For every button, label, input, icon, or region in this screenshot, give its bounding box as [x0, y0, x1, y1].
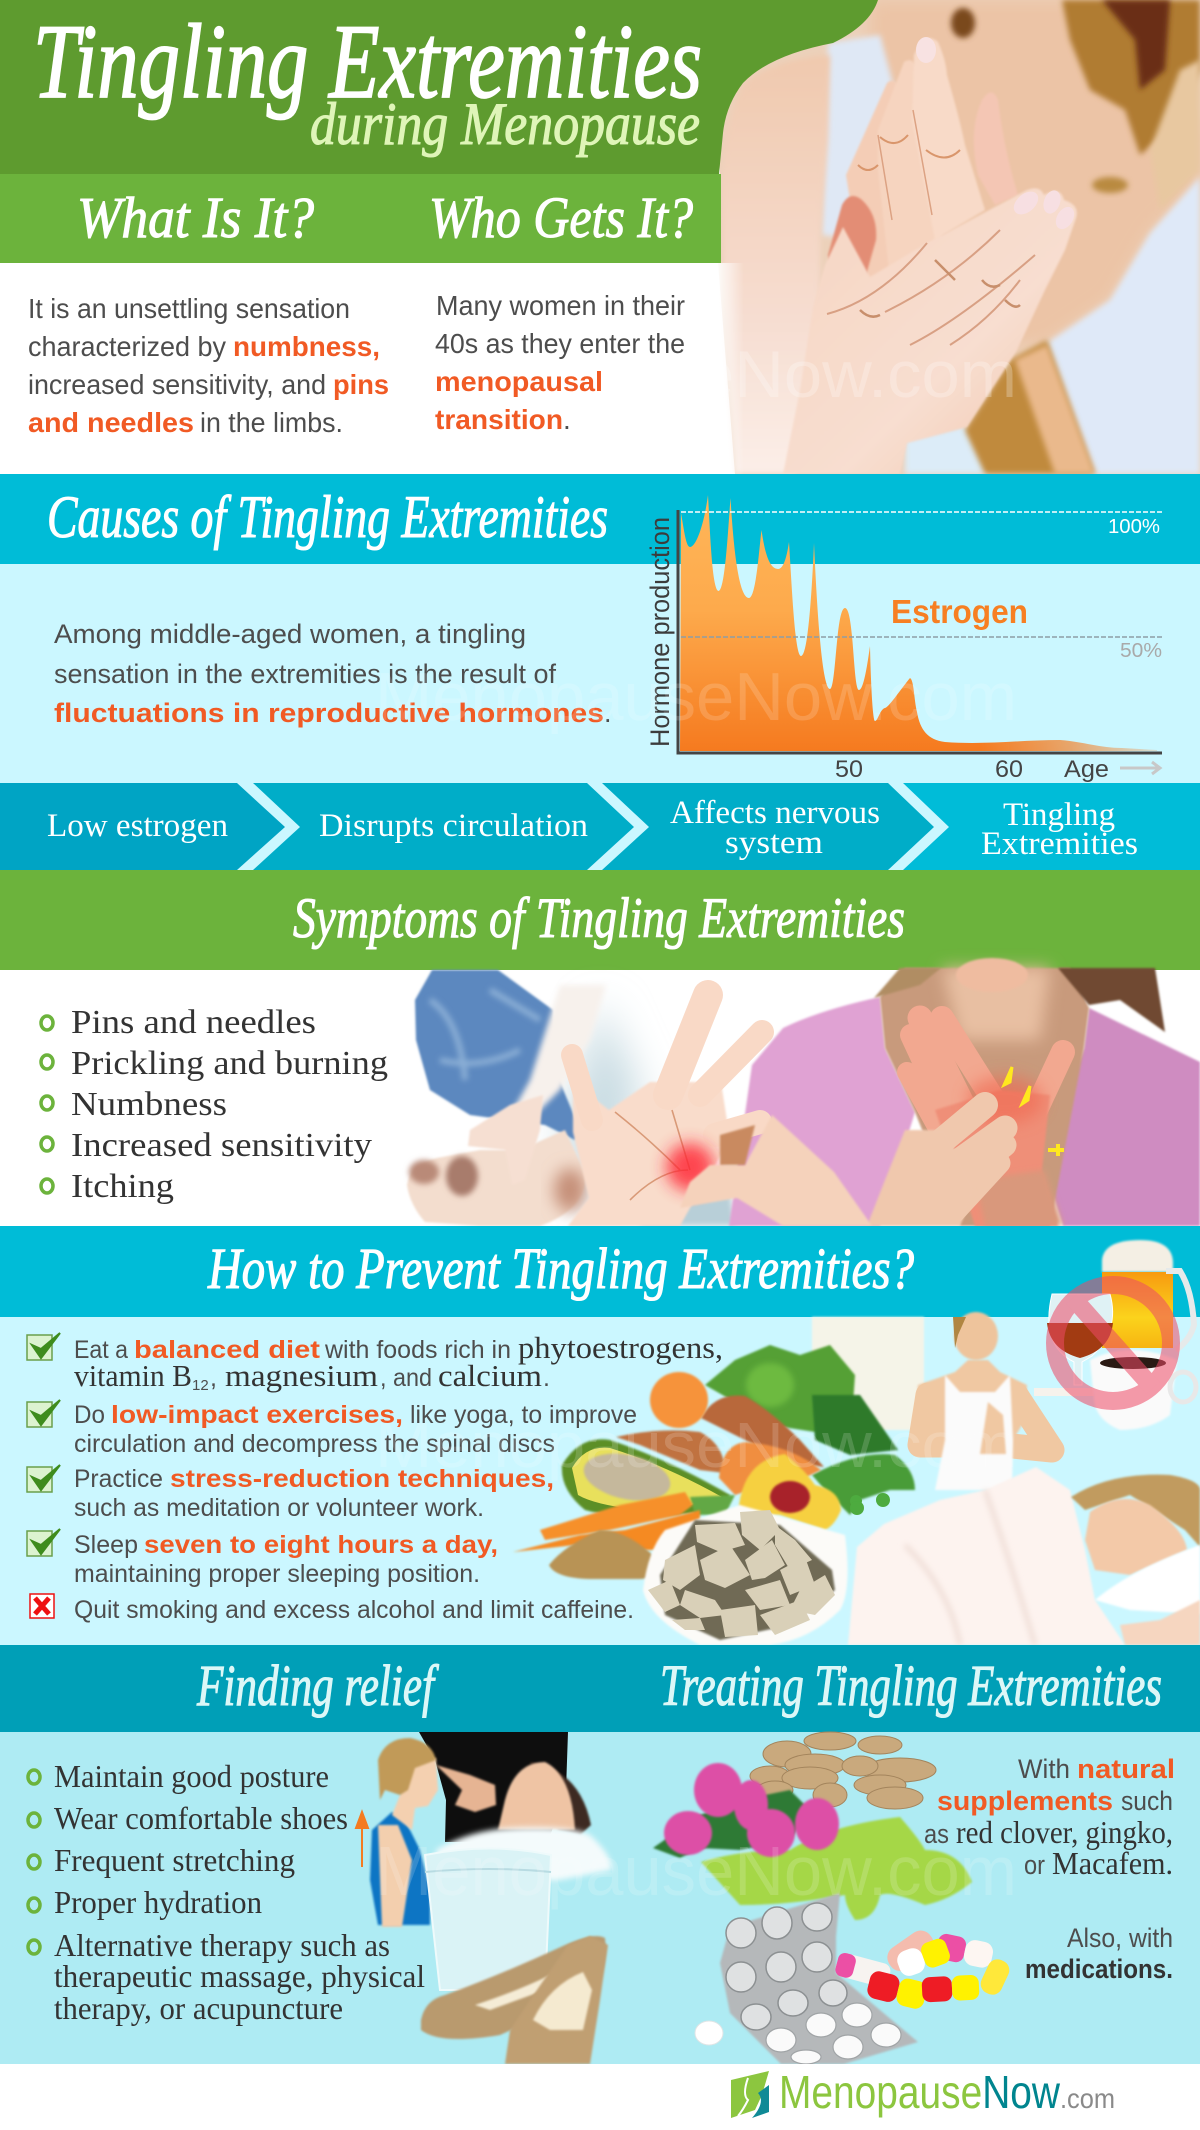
text block: who gets it: Many women in their [436, 290, 685, 321]
logo domain: .com [1060, 2083, 1115, 2114]
text block: natural supplements: natural [1077, 1754, 1175, 1784]
photo: jeans highlights [430, 990, 540, 1080]
photo: rear thumb [974, 92, 1018, 205]
photo: palm lines [615, 1110, 690, 1200]
photo: peach [739, 1454, 841, 1530]
photo: sweet potato big [701, 1395, 824, 1467]
list item: balanced diet: Eat a [74, 1336, 128, 1364]
photo: lower hand back [867, 1130, 975, 1226]
title [33, 3, 702, 157]
step label: tingling extremities [981, 797, 1138, 862]
photo: clover leaves [653, 1790, 810, 1858]
text block: natural supplements: or [1024, 1850, 1045, 1880]
text block: who gets it [435, 290, 685, 435]
photo: third finger [846, 81, 925, 290]
list item: balanced diet: balanced diet [134, 1336, 321, 1364]
chart tick: 60: 60 [995, 756, 1023, 783]
photo: whisky glass [1049, 1294, 1113, 1385]
photo: capsule red and yellow two [921, 1975, 980, 2002]
photo: towel [436, 1827, 612, 1880]
panel: prevention body [0, 1317, 1200, 1645]
photo: bluish shadow under pinch [640, 1190, 735, 1226]
photo: pink top right [1043, 1008, 1200, 1226]
text block: natural supplements: such [1121, 1786, 1173, 1816]
photo: beer foam [1102, 1240, 1173, 1272]
photo: chest and neck skin [870, 0, 1200, 350]
heading: what is it: What Is It? [77, 185, 314, 250]
photo: carrot one [540, 1492, 693, 1540]
logo: MenopauseNow [731, 2066, 1115, 2118]
photo: relief collage [356, 1732, 612, 2064]
photo: nail long finger [916, 37, 936, 63]
list item: balanced diet: . [543, 1364, 550, 1392]
list item: sleep: seven to eight hours a day, [144, 1531, 498, 1559]
photo: patient hair [530, 1762, 591, 1835]
arrow segment: disrupts circulation [253, 783, 642, 870]
photo: dark spinach [812, 1395, 898, 1455]
photo: pinching hand [680, 1115, 872, 1226]
photo: pale shadow beside sleeve [560, 1000, 640, 1226]
photo: white fade on the left [716, 263, 744, 474]
photo: white sleeve [505, 985, 606, 1130]
heading: finding relief: Finding relief [196, 1653, 439, 1718]
text block: what is it: characterized by [28, 331, 226, 362]
text block: causes [54, 619, 612, 728]
arrow segment: low estrogen [0, 783, 292, 870]
photo: long finger [912, 38, 985, 240]
text block: causes: Among middle-aged women, a tingling [54, 619, 526, 649]
photo: hair right [1058, 968, 1165, 1032]
panel: symptoms body [0, 970, 1200, 1226]
list item: balanced diet: , [210, 1364, 217, 1392]
photo: finger creases [858, 135, 960, 170]
text block: medications [1025, 1923, 1173, 1984]
photo: foot sole [407, 1130, 586, 1226]
arrow: orange upward arrow [356, 1812, 368, 1867]
photo: front hand and wrist [783, 188, 1077, 474]
panel: causes heading band [0, 474, 1200, 564]
symptom list: Itching [71, 1168, 174, 1205]
photo: palm on chest [935, 1090, 1058, 1226]
text block: causes: sensation in the extremities is the result of [54, 659, 556, 689]
photo: forearm highlight [1015, 345, 1095, 474]
list item: low-impact exercises: low-impact exercises, [111, 1401, 403, 1429]
photo: shoe insole [533, 1972, 592, 2030]
bullet [41, 1016, 53, 1030]
photo: woman blue top [370, 1812, 430, 1925]
step label: low estrogen: Low estrogen [47, 808, 228, 844]
arrow segment: affects nervous system [602, 783, 942, 870]
symptom list [41, 1004, 388, 1205]
photo: arch bruise [446, 1156, 478, 1196]
photo: open hand palm [568, 1082, 730, 1226]
icon: check two [27, 1400, 60, 1427]
text block: what is it [28, 293, 389, 438]
relief list: Alternative therapy such as [54, 1927, 390, 1963]
photo: window background [812, 1317, 924, 1430]
heading: causes: Causes of Tingling Extremities [47, 484, 608, 550]
title line one: Tingling Extremities [33, 3, 702, 120]
panel: footer [0, 2064, 1200, 2130]
bullet [28, 1855, 40, 1869]
photo: peas [812, 1454, 915, 1515]
photo: hand on chest [907, 1018, 1063, 1150]
text block: medications: medications. [1025, 1954, 1173, 1984]
list item: low-impact exercises: like yoga, to improve [410, 1401, 637, 1429]
photo: shoe front [505, 1936, 608, 2064]
photo: tofu bowl [643, 1505, 848, 1645]
photo: sweet potato slice [650, 1372, 708, 1428]
watermark: MenopauseNow.com [375, 1409, 1017, 1481]
photo: pillow [1095, 1545, 1200, 1614]
photo: shoulder and upper arm [722, 55, 830, 474]
photo: coffee [1100, 1357, 1166, 1369]
panel: prevention heading band [0, 1226, 1200, 1317]
list item continuation: therapy, or acupuncture [54, 1990, 343, 2026]
list item: low-impact exercises: Do [74, 1401, 105, 1429]
chart series label: Estrogen [891, 593, 1028, 630]
chart area: estrogen curve [680, 495, 1157, 751]
photo: lower hand fingers [925, 1105, 1005, 1212]
step label: affects nervous system [670, 795, 880, 861]
text block: causes: . [604, 698, 612, 728]
text block: natural supplements: supplements [937, 1786, 1113, 1816]
list item: balanced diet: magnesium [225, 1358, 378, 1393]
icon: yellow pin one [1004, 1067, 1012, 1085]
text block: natural supplements [924, 1754, 1175, 1881]
icon: check four [27, 1529, 60, 1556]
photo: capsule yellow [977, 1956, 1013, 1998]
photo: shoe inner [475, 1975, 550, 2010]
list item: balanced diet [74, 1330, 723, 1394]
text block: what is it: pins [333, 369, 389, 400]
photo: capsule red and yellow one [865, 1969, 929, 2011]
list item: stress reduction: Practice [74, 1465, 163, 1493]
photo: chest highlights right [1150, 60, 1200, 210]
symptom list: Increased sensitivity [71, 1127, 372, 1164]
photo: sleeping woman face [1085, 1499, 1187, 1575]
photo: therapist arm [436, 1765, 496, 1812]
photo: leafy stems [690, 1495, 735, 1515]
photo: hair [1062, 0, 1200, 155]
symptom list: Pins and needles [71, 1004, 316, 1041]
text block: causes: fluctuations in reproductive hormones [54, 698, 604, 728]
photo: yoga woman hair [953, 1317, 966, 1348]
relief list [28, 1758, 425, 2026]
photo: tofu shade [660, 1520, 835, 1640]
symptom list: Prickling and burning [71, 1045, 388, 1082]
bullet [28, 1770, 40, 1784]
list item: sleep: Sleep [74, 1531, 138, 1559]
photo: redness on chest hand [967, 1076, 1043, 1124]
photo: water glass [425, 1848, 551, 1990]
icon: prohibition sign [1055, 1285, 1171, 1401]
photo: finger separators [878, 110, 932, 220]
list item: balanced diet: , and [380, 1364, 432, 1392]
text block: medications: Also, with [1067, 1923, 1173, 1953]
watermark: MenopauseNow.com [375, 1832, 1017, 1910]
photo: pink top left [729, 997, 915, 1226]
photo: therapist [419, 1732, 568, 1842]
chart tick: 50: 50 [835, 756, 863, 783]
photo: whisky [1047, 1323, 1113, 1358]
text block: natural supplements: With [1018, 1754, 1070, 1784]
chart: estrogen production by age [645, 495, 1162, 783]
text block: what is it: in the limbs. [200, 407, 343, 438]
heading: symptoms: Symptoms of Tingling Extremities [293, 887, 905, 950]
photo: capsule right [935, 1932, 995, 1970]
bullet [41, 1055, 53, 1069]
photo: woman hair [378, 1738, 436, 1800]
step label: tingling extremities: Extremities [981, 826, 1138, 862]
photo: loose white pill [695, 2021, 723, 2045]
photo: second finger [878, 60, 945, 280]
photo: capsule pink [883, 1926, 939, 1976]
bullet [41, 1096, 53, 1110]
photo: knuckle wrinkles [860, 260, 1020, 317]
photo: sweet potato second [616, 1430, 725, 1473]
text block: who gets it: menopausal [435, 366, 603, 397]
photo: praying hands [980, 1402, 1006, 1454]
photo: capsule left [834, 1951, 892, 1989]
step label: tingling extremities: Tingling [1003, 797, 1115, 833]
logo wordmark: MenopauseNow [779, 2066, 1061, 2118]
photo: glass water surface [425, 1869, 551, 1872]
text block: natural supplements: as [924, 1819, 949, 1849]
photo: patient face [498, 1762, 575, 1830]
photo: prevention collage [513, 1240, 1200, 1645]
list item: low-impact exercises [74, 1401, 637, 1458]
list item: balanced diet: phytoestrogens, [518, 1330, 723, 1365]
photo: woman neck and face [392, 1758, 438, 1830]
photo: beer [1102, 1272, 1173, 1348]
photo: shirt right [1040, 177, 1200, 474]
chart x-axis label: Age [1064, 756, 1109, 783]
photo: sleeping woman hair [1071, 1475, 1200, 1547]
symptom list: Numbness [71, 1086, 227, 1123]
photo: open hand fingers [572, 995, 762, 1135]
text block: what is it: and needles [28, 407, 194, 438]
text block: who gets it: 40s as they enter the [435, 328, 685, 359]
photo: chin [956, 958, 1028, 992]
photo: spinach highlight [746, 1363, 794, 1407]
photo: collarbone shade [1092, 177, 1128, 193]
relief list: Proper hydration [54, 1884, 262, 1920]
bullet [41, 1179, 53, 1193]
bullet [28, 1813, 40, 1827]
chart label: 100 percent: 100% [1108, 516, 1160, 538]
step label: affects nervous system: system [725, 825, 823, 861]
photo: redness at pinch point [666, 1143, 714, 1191]
list item: balanced diet: vitamin B [74, 1358, 192, 1393]
photo: peach stone [770, 1481, 810, 1513]
photo: tofu cubes [648, 1510, 835, 1637]
icon: yellow pin three [1048, 1144, 1064, 1156]
photo: ball of foot [409, 1160, 439, 1184]
text block: what is it: numbness, [233, 331, 380, 362]
panel: title band [0, 0, 878, 174]
relief list: Maintain good posture [54, 1758, 329, 1794]
photo: hand on foot [468, 1095, 543, 1185]
photo: shoe rear [421, 1936, 605, 2039]
panel: what is it and who gets it heading band [0, 174, 721, 263]
bullet [41, 1137, 53, 1151]
list item continuation: therapeutic massage, physical [54, 1958, 425, 1994]
photo: heel shade [554, 1168, 586, 1212]
heading: prevention: How to Prevent Tingling Extremities? [207, 1236, 914, 1301]
photo: ginkgo leaves [701, 1817, 972, 1920]
icon: check one [27, 1333, 60, 1360]
photo: cigarette [1034, 1388, 1094, 1396]
panel: relief and treatment body [0, 1732, 1200, 2064]
photo: wrist [975, 1170, 1063, 1226]
chart y-axis label: Hormone production [645, 517, 675, 747]
photo: arm [1120, 1600, 1200, 1645]
panel: causal chain arrows [0, 783, 1200, 870]
panel: symptoms heading band [0, 870, 1200, 970]
photo: empty blisters [726, 1903, 847, 2030]
icon: logo profile [731, 2071, 769, 2118]
photo: avocado [562, 1439, 730, 1516]
photo: yoga woman top [935, 1375, 1013, 1490]
photo: woman arm [378, 1825, 412, 1927]
panel: relief and treatment heading band [0, 1645, 1200, 1732]
photo: fold shadow in pinching hand [720, 1125, 755, 1165]
photo: capsule white and yellow [894, 1936, 952, 1979]
bullet [28, 1898, 40, 1912]
photo: sleeping woman blanket [848, 1467, 1125, 1645]
arrow: age direction [1120, 762, 1160, 774]
panel: causes body [0, 564, 1200, 783]
chart line: 100 percent [681, 511, 1162, 513]
text block: what is it: increased sensitivity, and [28, 369, 326, 400]
photo: soybeans [549, 1530, 663, 1579]
relief list: Frequent stretching [54, 1842, 295, 1878]
photo: forearm right [965, 340, 1095, 474]
text block: who gets it: transition [435, 404, 563, 435]
photo: avocado flesh [572, 1448, 722, 1510]
arrow separator three [888, 783, 949, 870]
step label: disrupts circulation: Disrupts circulation [319, 808, 588, 844]
photo: beer handle [1166, 1271, 1194, 1350]
photo: treatment collage [653, 1732, 1013, 2064]
list item: balanced diet: calcium [438, 1358, 542, 1393]
photo: cup handle [1170, 1372, 1196, 1402]
list item: stress reduction [74, 1465, 554, 1522]
photo: symptoms collage [407, 958, 1200, 1226]
photo: shirt between arms [905, 425, 990, 474]
watermark: MenopauseNow.com [375, 659, 1017, 735]
photo: blanket fold [905, 1490, 1035, 1645]
photo: yoga woman chest and shoulders [915, 1360, 1027, 1440]
list item: low-impact exercises: circulation and decompress the spinal discs [74, 1430, 555, 1458]
chart line: 50 percent [681, 636, 1162, 638]
photo: avocado seed [579, 1446, 675, 1508]
chart axes [678, 510, 1162, 753]
bullet [28, 1940, 40, 1954]
photo: fingernails [1009, 187, 1078, 232]
step label: affects nervous system: Affects nervous [670, 795, 880, 831]
photo: spinach [705, 1345, 855, 1432]
panel: hand photo [700, 0, 1200, 474]
photo: clover flowers [664, 1763, 839, 1857]
list item: stress reduction: stress-reduction techniques, [170, 1465, 554, 1493]
title line two: during Menopause [310, 91, 700, 157]
list item: stress reduction: such as meditation or volunteer work. [74, 1494, 484, 1522]
arrow separator one [237, 783, 300, 870]
photo: yoga woman arms [920, 1395, 1052, 1450]
photo: neck and chest [880, 968, 1089, 1226]
photo: supplement tablets [750, 1732, 936, 1809]
icon: check three [27, 1465, 60, 1492]
list item: balanced diet: with foods rich in [324, 1336, 511, 1364]
list item: sleep [74, 1531, 498, 1588]
photo: neck hollow [951, 8, 975, 38]
heading: who gets it: Who Gets It? [429, 185, 693, 250]
list item: balanced diet: 12 [192, 1377, 209, 1394]
text block: natural supplements: Macafem. [1052, 1845, 1173, 1881]
arrow separator two [587, 783, 649, 870]
icon: yellow pin two [1022, 1086, 1030, 1104]
photo: neck light [942, 968, 1050, 1040]
photo: jeans [415, 970, 580, 1140]
list item: sleep: maintaining proper sleeping position. [74, 1560, 480, 1588]
checklist [27, 1330, 723, 1624]
relief list: Wear comfortable shoes [54, 1800, 348, 1836]
text block: what is it: It is an unsettling sensation [28, 293, 350, 324]
photo: loose peas [850, 1493, 890, 1515]
text block: who gets it: . [563, 404, 571, 435]
watermark: MenopauseNow.com [375, 337, 1017, 411]
photo: hair left [874, 968, 941, 998]
photo: red thumb [828, 196, 876, 285]
photo: coffee cup [1090, 1350, 1177, 1430]
photo: blister tablets [766, 2003, 901, 2064]
icon: red cross [30, 1594, 54, 1618]
photo: knuckle creases [827, 230, 1035, 345]
photo: dark hair core [1102, 0, 1170, 90]
list item: quit smoking: Quit smoking and excess alcohol and limit caffeine. [74, 1596, 634, 1624]
photo: blister pack [720, 1893, 918, 2064]
photo: carrot two [513, 1510, 700, 1552]
photo: yoga woman head [954, 1312, 998, 1360]
text block: natural supplements: red clover, gingko, [956, 1814, 1173, 1850]
chart label: 50 percent: 50% [1120, 640, 1162, 662]
photo: shirt strap [822, 35, 900, 240]
photo: orange flesh [719, 1442, 821, 1495]
